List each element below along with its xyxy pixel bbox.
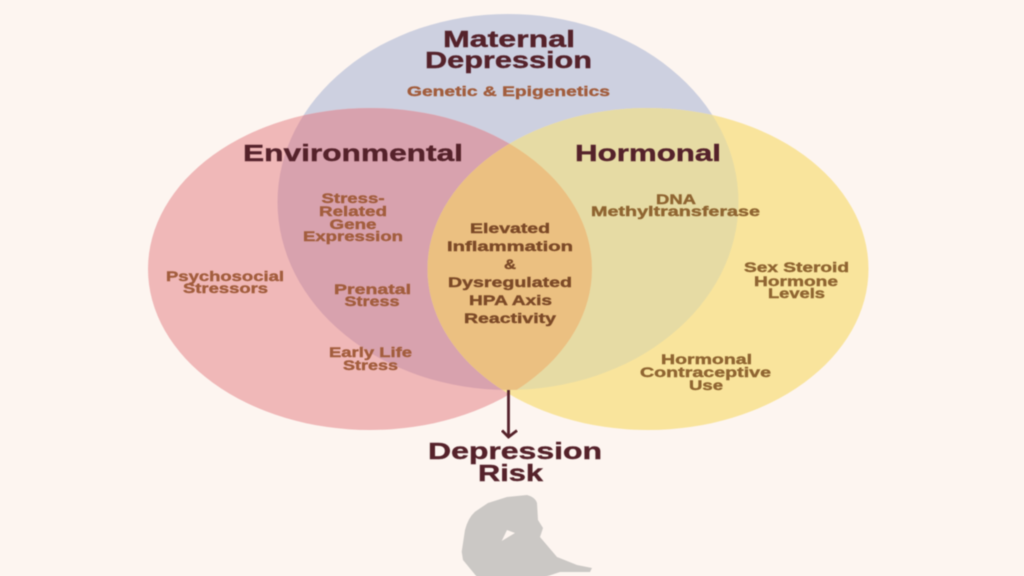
text: prenatal stress [334, 281, 411, 309]
text: stress-related gene expression: Gene [330, 216, 377, 232]
text: dna methyltransferase: DNA [656, 191, 696, 207]
text: hormonal contraceptive use: Use [689, 377, 723, 393]
title: maternal depression: Depression [425, 47, 592, 73]
text: centre overlap: Inflammation [447, 238, 573, 254]
heading: depression risk: Depression [428, 438, 602, 464]
text: stress-related gene expression: Stress- [322, 190, 385, 206]
text: hormonal contraceptive use: Hormonal [661, 351, 752, 367]
text: centre overlap: Reactivity [464, 310, 556, 326]
text: sex steroid hormone levels [744, 259, 849, 301]
heading: depression risk [428, 438, 602, 486]
text: stress-related gene expression: Related [319, 203, 387, 219]
icon: seated figure silhouette [462, 495, 592, 576]
text: early life stress: Early Life [329, 344, 412, 360]
overlap: centre [427, 144, 592, 390]
text: centre overlap [447, 220, 573, 326]
circle: environmental [148, 108, 592, 430]
overlap: environmental and maternal [278, 108, 509, 390]
text: dna methyltransferase [591, 191, 760, 219]
text: psychosocial stressors [166, 268, 284, 296]
text: sex steroid hormone levels: Levels [768, 285, 825, 301]
text: centre overlap: Dysregulated [448, 274, 572, 290]
text: stress-related gene expression: Expression [303, 228, 403, 244]
title: maternal depression [425, 26, 592, 73]
text: stress-related gene expression [303, 190, 403, 244]
title: maternal depression: Maternal [443, 26, 575, 52]
text: early life stress: Stress [343, 357, 398, 373]
arrow [502, 390, 517, 437]
venn diagram [148, 14, 868, 430]
text: sex steroid hormone levels: Sex Steroid [744, 259, 849, 275]
text: hormonal contraceptive use: Contraceptive [640, 364, 771, 380]
venn labels [166, 26, 849, 393]
text: genetic and epigenetics: Genetic & Epigenetics [407, 83, 610, 99]
circle: hormonal [428, 108, 868, 430]
text: centre overlap: HPA Axis [469, 292, 552, 308]
text: prenatal stress: Stress [344, 293, 400, 309]
heading: depression risk: Risk [478, 460, 543, 486]
text: psychosocial stressors: Stressors [183, 280, 268, 296]
heading: environmental: Environmental [243, 140, 463, 166]
overlap: hormonal and maternal [510, 108, 738, 390]
text: prenatal stress: Prenatal [334, 281, 411, 297]
text: early life stress [329, 344, 412, 373]
text: psychosocial stressors: Psychosocial [166, 268, 284, 284]
text: centre overlap: Elevated [470, 220, 550, 236]
text: dna methyltransferase: Methyltransferase [591, 203, 760, 219]
text: sex steroid hormone levels: Hormone [754, 273, 838, 289]
circle: maternal depression [278, 14, 738, 390]
heading: hormonal: Hormonal [575, 140, 721, 166]
text: hormonal contraceptive use [640, 351, 771, 393]
text: centre overlap: & [504, 256, 516, 272]
